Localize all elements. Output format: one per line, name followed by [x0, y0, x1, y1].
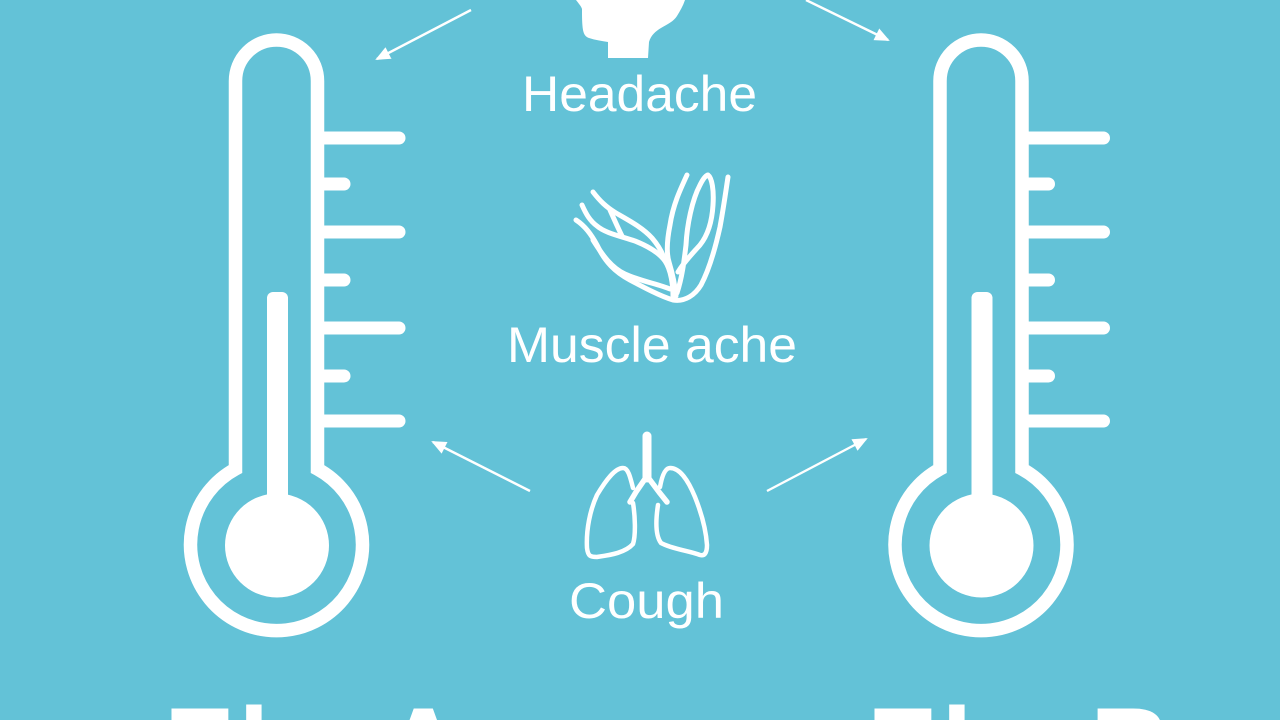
thermometer: Flu A [190, 40, 399, 631]
thermometer: Flu B [895, 40, 1104, 631]
arrow: top left [377, 10, 471, 59]
label: Headache: Headache [522, 66, 757, 122]
arrow: top right [806, 0, 888, 40]
label: Muscle ache: Muscle ache [507, 317, 797, 373]
icon: head [576, 0, 685, 58]
icon: muscle [576, 175, 728, 300]
arrow: lower right [767, 439, 866, 491]
label: Cough: Cough [569, 573, 724, 629]
icon: lungs [587, 436, 707, 557]
arrow: lower left [433, 442, 530, 491]
